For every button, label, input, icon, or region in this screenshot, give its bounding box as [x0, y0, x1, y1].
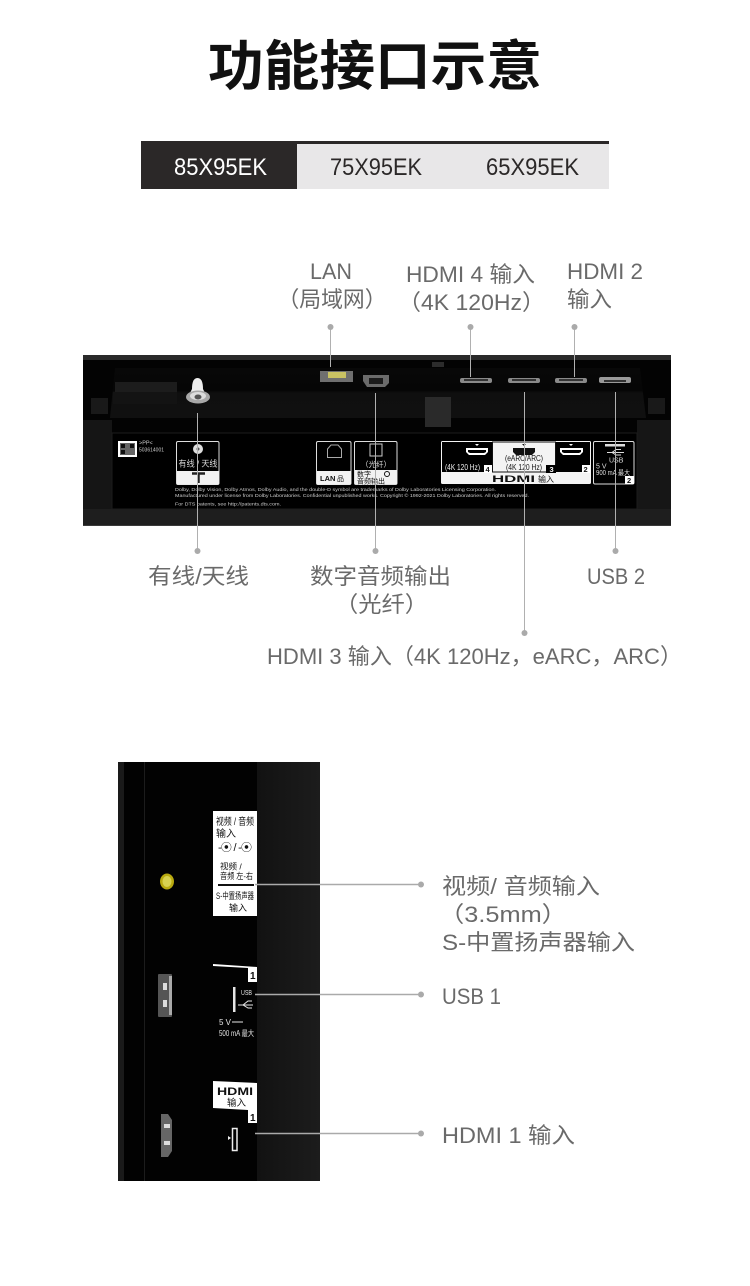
- sticker: antenna: 有线 / 天线: [178, 458, 218, 468]
- label: LAN: （局域网）: [278, 287, 386, 312]
- port: 3.5mm jack: [160, 874, 174, 890]
- sticker: video audio input: [213, 811, 257, 916]
- port: HDMI 1: [161, 1114, 172, 1157]
- legal text: [175, 487, 529, 508]
- recessed shelf: [110, 368, 646, 418]
- label: video audio input: （3.5mm）: [439, 902, 567, 927]
- port: optical: [363, 375, 389, 387]
- label: video audio input: 视频/ 音频输入: [442, 874, 600, 899]
- port: HDMI 2: [555, 378, 587, 383]
- title: 功能接口示意: [208, 37, 542, 97]
- legal text: Manufactured under license from Dolby Laboratories. Confidential unpublished works. Copyright © 1992-2021 Dolby Laboratories. All rights reserved.: [175, 492, 529, 499]
- label: optical audio: 数字音频输出: [310, 564, 451, 589]
- sticker: HDMI group: (eARC/ARC): [505, 454, 543, 463]
- sticker: video audio input: 视频 /: [220, 862, 242, 872]
- leader lines for side panel: [255, 882, 424, 1136]
- label: optical audio: [310, 564, 451, 617]
- port: HDMI 3: [508, 378, 540, 383]
- sticker: LAN: [316, 442, 351, 484]
- sticker: HDMI group: 2: [584, 465, 588, 474]
- label: video audio input: [439, 874, 635, 955]
- label: HDMI 4: （4K 120Hz）: [398, 290, 545, 315]
- model code: >PP<: [139, 440, 153, 446]
- label: HDMI 3: HDMI 3 输入（4K 120Hz，eARC，ARC）: [267, 644, 682, 669]
- tab label: 85X95EK: 85X95EK: [174, 154, 267, 181]
- sticker: USB 1: [213, 964, 257, 1038]
- sticker: USB 2: [594, 442, 634, 485]
- sticker: HDMI group: 3: [550, 465, 554, 474]
- sticker: LAN: LAN: [320, 474, 335, 483]
- sticker: USB 1: 1: [250, 971, 256, 982]
- sticker: optical: （光纤）: [361, 459, 391, 469]
- panel: TV side ports: [118, 762, 320, 1181]
- sticker: HDMI 1: 输入: [227, 1097, 247, 1109]
- label: video audio input: S-中置扬声器输入: [442, 930, 635, 955]
- sticker: video audio input: S-中置扬声器: [216, 890, 254, 901]
- label: USB 1: USB 1: [442, 984, 501, 1009]
- sticker: LAN: 品: [337, 475, 344, 483]
- port: HDMI 4: [460, 378, 492, 383]
- label: antenna: 有线/天线: [148, 564, 249, 589]
- label: LAN: [278, 259, 386, 312]
- sticker: optical: [354, 442, 397, 486]
- sticker: video audio input: 输入: [216, 827, 236, 840]
- sticker panel: [112, 433, 637, 509]
- label: HDMI 4: [398, 262, 545, 315]
- tab label: 65X95EK: 65X95EK: [486, 154, 579, 181]
- sticker: USB 2: 5 V: [596, 464, 607, 470]
- sticker: HDMI group: 4: [486, 465, 490, 474]
- port: USB 1: [158, 974, 172, 1017]
- panel: TV rear ports: [83, 355, 671, 526]
- port: LAN: [320, 371, 353, 382]
- sticker: optical: 数字: [357, 470, 371, 478]
- legal text: Dolby, Dolby Vision, Dolby Atmos, Dolby Audio, and the double-D symbol are trademarks of Dolby Laboratories Licensing Corporation.: [175, 487, 496, 493]
- sticker: video audio input: 视频 / 音频: [216, 815, 254, 828]
- tab label: 75X95EK: 75X95EK: [330, 154, 422, 181]
- label: HDMI 1: HDMI 1 输入: [442, 1123, 575, 1148]
- tab: 85X95EK active: [141, 141, 297, 189]
- sticker: USB 2: 2: [627, 476, 631, 485]
- sticker: HDMI 1: 1: [250, 1113, 256, 1124]
- sticker: HDMI group: HDMI: [492, 474, 535, 485]
- sticker: USB 1: USB: [241, 988, 252, 997]
- label: HDMI 4: HDMI 4 输入: [406, 262, 535, 287]
- legal text: For DTS patents, see http://patents.dts.com.: [175, 502, 281, 508]
- sticker: USB 1: 5 V: [219, 1018, 232, 1027]
- port: USB 2: [599, 377, 631, 383]
- sticker: HDMI group: 输入: [538, 474, 554, 484]
- sticker: USB 2: USB: [609, 458, 624, 464]
- model code: [139, 440, 164, 454]
- micro HDMI symbol: [228, 1128, 237, 1150]
- label: LAN: LAN: [310, 259, 352, 284]
- model code: 503614001: [139, 448, 164, 454]
- sticker: USB 2: 900 mA 最大: [596, 468, 630, 477]
- sticker: HDMI group: (4K 120 Hz): [445, 463, 480, 472]
- port: antenna connector: [186, 378, 210, 404]
- sticker: USB 1: 500 mA 最大: [219, 1028, 254, 1038]
- sticker: optical: 音频输出: [357, 476, 385, 486]
- label: HDMI 2: HDMI 2: [567, 259, 643, 284]
- sticker: HDMI 1: [213, 1081, 257, 1124]
- leader lines for upper panel: [194, 324, 618, 636]
- sticker: video audio input: 音频 左-右: [220, 871, 253, 881]
- sticker: HDMI 1: HDMI: [217, 1086, 253, 1098]
- sticker: video audio input: 输入: [229, 902, 247, 913]
- sticker: HDMI group: (4K 120 Hz): [506, 463, 542, 472]
- label: optical audio: （光纤）: [335, 592, 428, 617]
- label: HDMI 2: 输入: [567, 287, 612, 312]
- sticker: video audio input: -⦿ / -⦿: [218, 841, 252, 854]
- label: HDMI 2: [567, 259, 643, 312]
- sticker: antenna: [176, 442, 219, 484]
- model tabs: [141, 141, 609, 189]
- QR code: [118, 441, 137, 457]
- sticker: HDMI group: [441, 441, 591, 485]
- label: USB 2: USB 2: [587, 564, 645, 589]
